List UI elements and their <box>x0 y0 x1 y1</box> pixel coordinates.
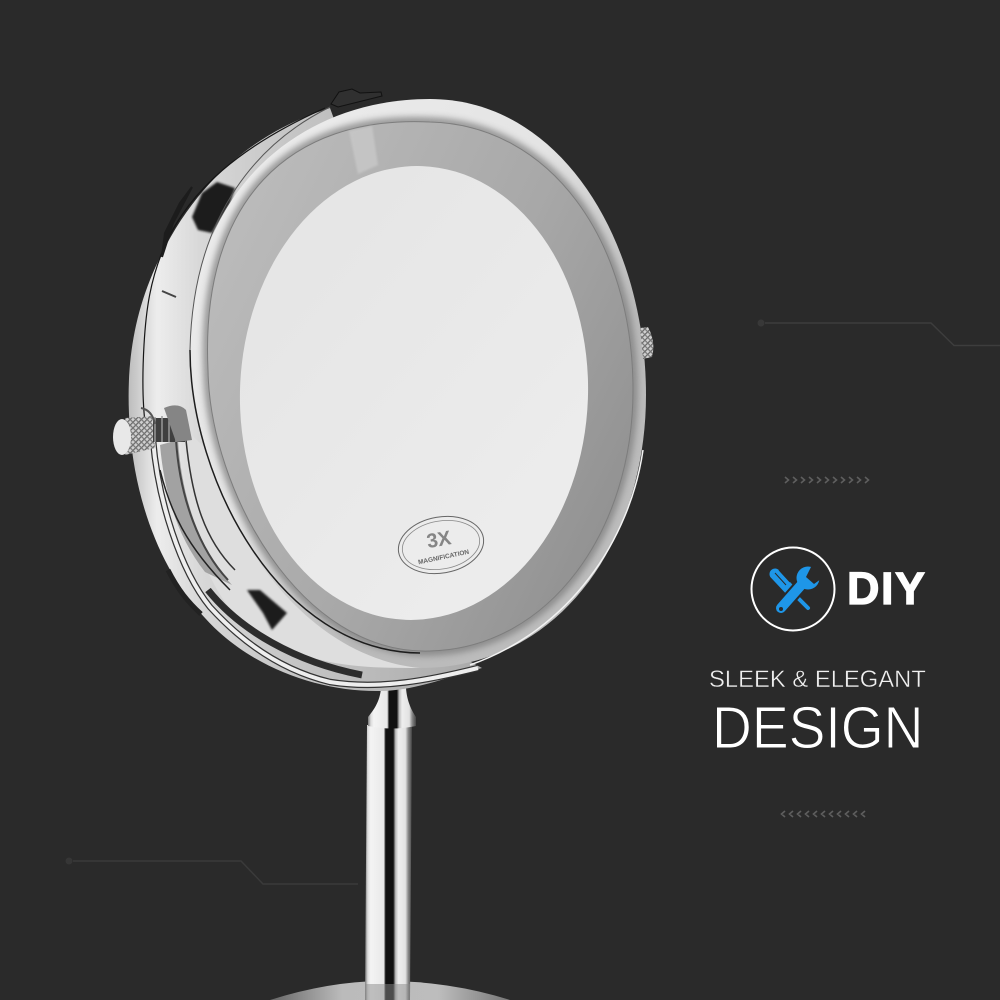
lower inner shaded band <box>160 440 232 585</box>
decorative chevrons: lower <box>782 811 865 817</box>
dark band under rim <box>208 590 362 675</box>
wrench <box>779 563 828 611</box>
base <box>270 981 510 1000</box>
rim dark edge upper <box>190 107 330 350</box>
mirror glass <box>232 160 596 626</box>
right knob <box>640 327 653 359</box>
heading: DESIGN <box>712 695 924 761</box>
icon: DIY tools badge <box>752 548 834 630</box>
decorative circuit line: upper right <box>758 320 1000 346</box>
magnification badge: MAGNIFICATION <box>418 549 470 566</box>
subheading: SLEEK & ELEGANT <box>709 666 926 693</box>
top switch <box>331 89 382 107</box>
mirror head <box>113 89 653 691</box>
collar <box>368 688 416 728</box>
back housing <box>129 108 482 691</box>
rim highlight lower right <box>470 450 643 665</box>
ring highlight <box>349 126 378 174</box>
magnification badge <box>394 510 488 580</box>
magnification badge: 3X <box>425 527 454 553</box>
decorative chevrons: upper <box>785 477 868 483</box>
upper dark reflection <box>192 182 235 233</box>
LED ring <box>208 122 633 651</box>
decorative circuit line: lower left <box>66 858 358 884</box>
rim inner shading <box>208 122 633 651</box>
rim dark reflection <box>247 590 287 630</box>
mirror stand <box>270 688 510 1000</box>
housing lines <box>143 108 325 430</box>
left knob <box>113 405 192 455</box>
DIY label: DIY <box>847 563 927 614</box>
U bracket <box>153 440 478 685</box>
front rim <box>190 99 646 668</box>
screwdriver <box>775 570 808 608</box>
rim dark edge lower <box>190 350 420 653</box>
lower front band <box>184 430 440 668</box>
stem <box>365 725 412 1000</box>
